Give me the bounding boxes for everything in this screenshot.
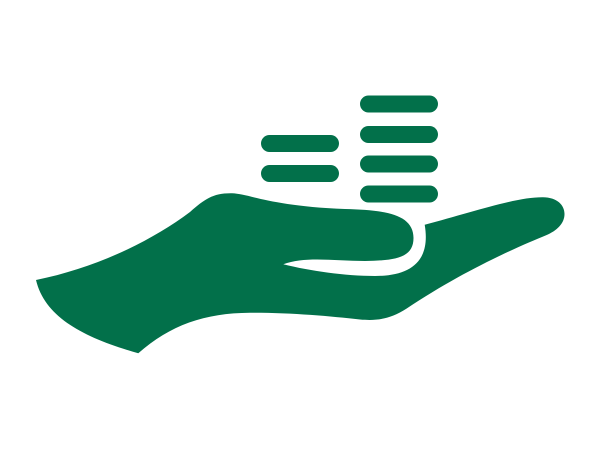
icon: right coin stack xyxy=(360,96,438,202)
coin xyxy=(360,156,438,172)
coin xyxy=(261,135,339,152)
coin xyxy=(360,96,438,112)
coin xyxy=(360,186,438,202)
coin xyxy=(360,126,438,143)
coin xyxy=(261,165,339,182)
icon: left coin stack xyxy=(261,135,339,182)
icon: open hand xyxy=(36,193,564,353)
